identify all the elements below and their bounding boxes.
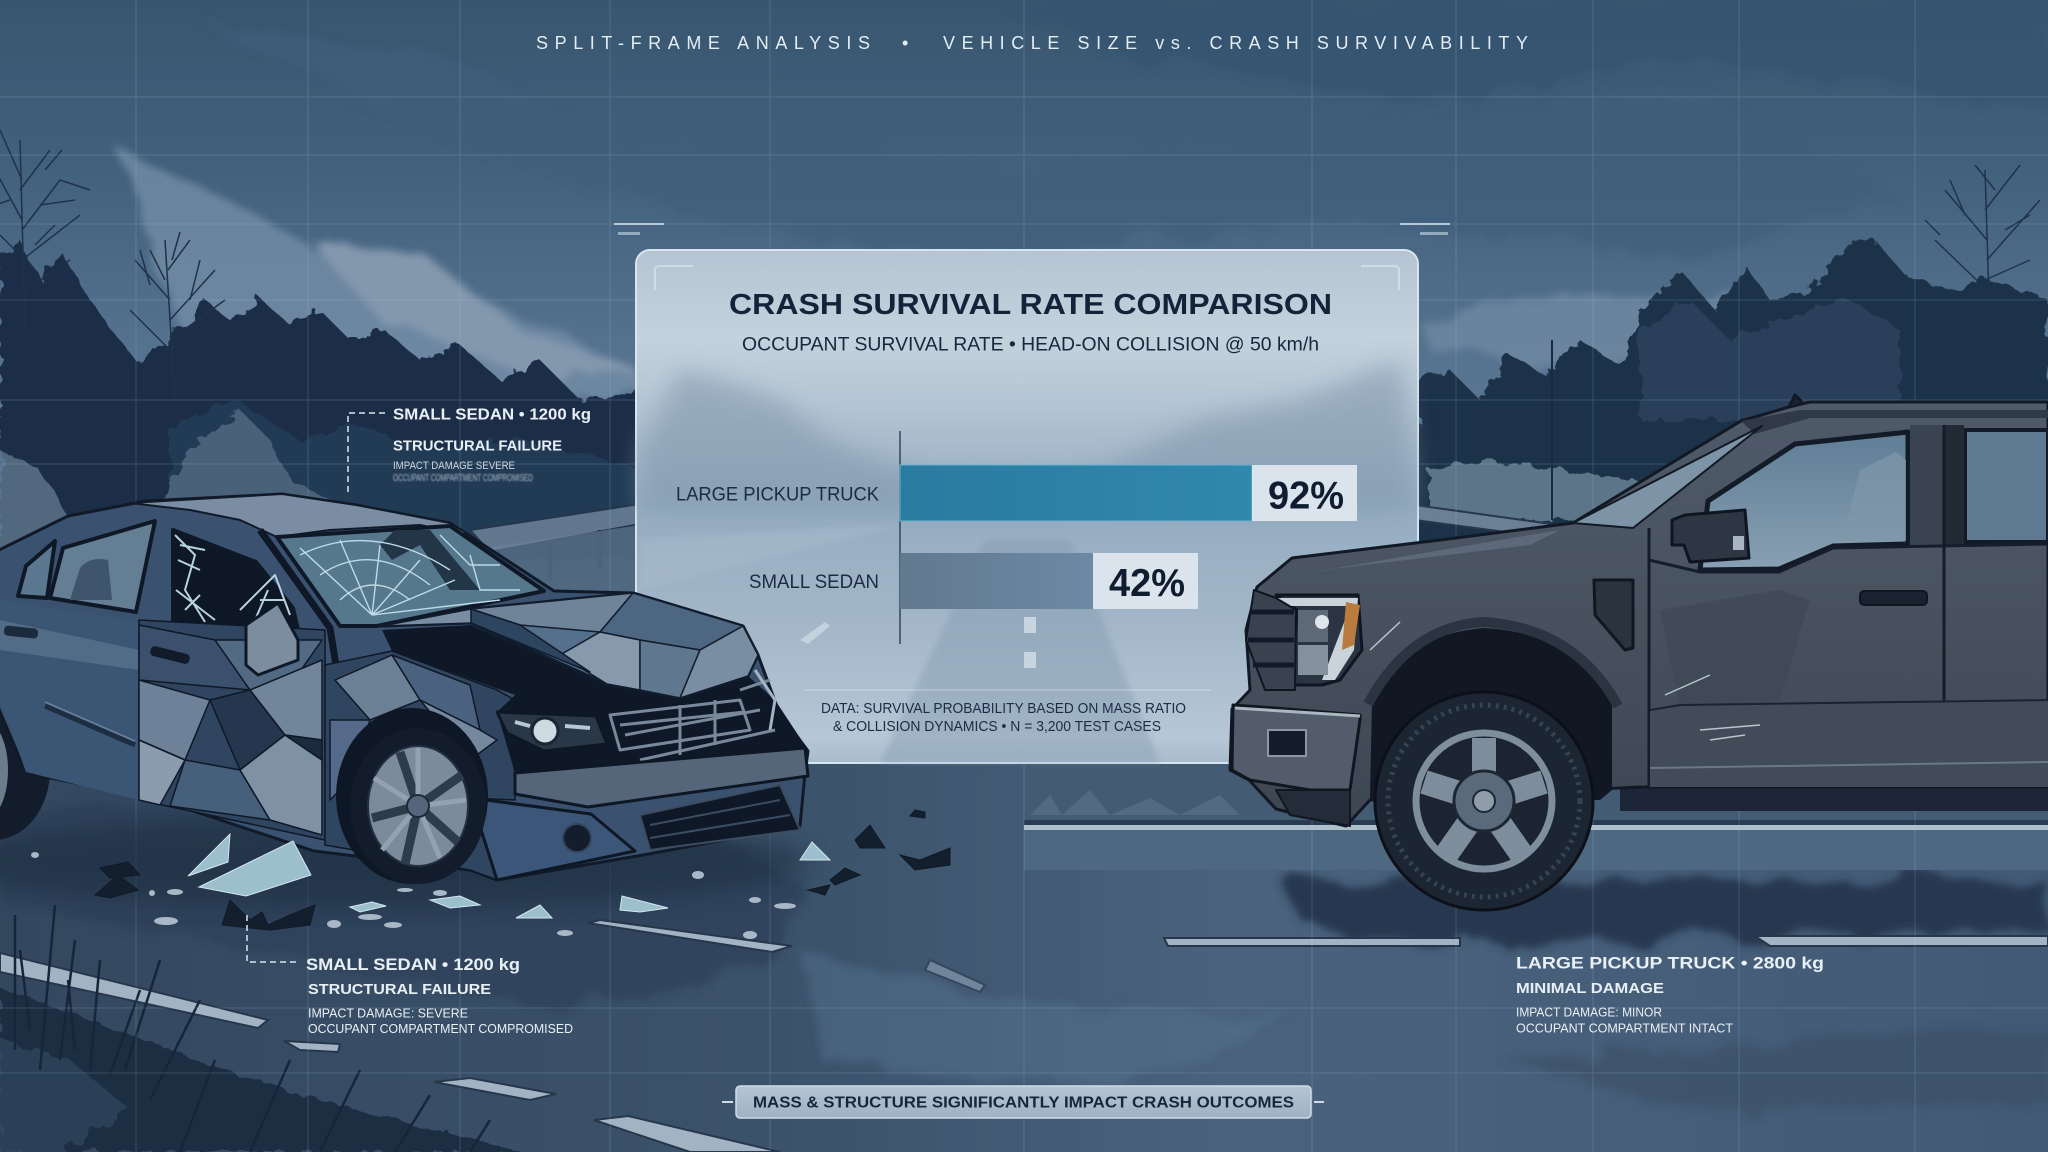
panel: crash survival chart bbox=[636, 250, 1418, 763]
sedan broken grille bbox=[610, 670, 775, 760]
data source note: & COLLISION DYNAMICS • N = 3,200 TEST CASES bbox=[833, 719, 1161, 735]
sedan rear windows bbox=[18, 521, 155, 612]
sedan side trim bbox=[45, 706, 135, 745]
truck belt line bbox=[1649, 544, 2048, 572]
sedan front wheel bbox=[336, 708, 488, 884]
background: bare branches left bbox=[0, 130, 225, 400]
callout: small sedan upper: OCCUPANT COMPARTMENT COMPROMISED bbox=[393, 473, 533, 484]
bar: small sedan: 42% bbox=[1109, 562, 1185, 605]
sedan door highlight bbox=[0, 620, 139, 670]
truck mud flap bbox=[1276, 790, 1350, 826]
sedan side mirror bbox=[246, 603, 298, 675]
bar: small sedan: SMALL SEDAN bbox=[749, 572, 879, 593]
truck bumper bbox=[1232, 705, 1360, 790]
truck fog lamp bbox=[1268, 730, 1306, 756]
illustration: pickup truck bbox=[1230, 395, 2048, 910]
panel background bbox=[636, 250, 1418, 763]
takeaway banner bbox=[722, 1086, 1324, 1118]
truck body bbox=[1230, 402, 2048, 826]
guardrail right bbox=[1415, 505, 1580, 542]
callout: small sedan lower bbox=[247, 915, 573, 1036]
callout: small sedan lower: OCCUPANT COMPARTMENT COMPROMISED bbox=[308, 1022, 573, 1036]
sedan shattered windshield bbox=[277, 526, 544, 626]
header strapline bbox=[536, 33, 1528, 53]
callout: small sedan upper bbox=[348, 406, 591, 492]
truck windshield bbox=[1573, 426, 1762, 528]
data source note: DATA: SURVIVAL PROBABILITY BASED ON MASS RATIO bbox=[821, 701, 1186, 717]
truck front wheel bbox=[1375, 692, 1593, 910]
header strapline: SPLIT-FRAME ANALYSIS bbox=[536, 33, 870, 53]
bar: large pickup truck: 92% bbox=[1268, 474, 1344, 518]
truck headlight bbox=[1276, 595, 1362, 685]
callout: small sedan upper: SMALL SEDAN • 1200 kg bbox=[393, 406, 591, 424]
sedan rear door panel bbox=[0, 600, 139, 800]
truck rear window bbox=[1965, 430, 2048, 542]
bar chart bbox=[676, 431, 1357, 644]
chart subtitle: OCCUPANT SURVIVAL RATE • HEAD-ON COLLISION @ 50 km/h bbox=[742, 334, 1319, 356]
background: bare branches right bbox=[1552, 165, 2040, 520]
bar: large pickup truck bbox=[676, 465, 1357, 521]
sedan engine bay bbox=[382, 625, 808, 773]
illustration: crashed sedan bbox=[0, 494, 810, 908]
bar: large pickup truck: LARGE PICKUP TRUCK bbox=[676, 484, 879, 506]
lane markings bbox=[0, 920, 2048, 1152]
sedan door handle bbox=[149, 645, 191, 665]
truck door dent bbox=[1660, 590, 1810, 710]
truck fender vent bbox=[1594, 580, 1633, 650]
callout: large pickup truck: LARGE PICKUP TRUCK • 2800 kg bbox=[1516, 954, 1824, 972]
truck front seat bbox=[1842, 452, 1906, 540]
callout: small sedan lower: IMPACT DAMAGE: SEVERE bbox=[308, 1006, 468, 1020]
sedan headlight bbox=[497, 712, 607, 751]
road surface bbox=[0, 760, 2048, 1152]
sedan rear handle bbox=[4, 625, 38, 639]
truck wheel arch bbox=[1370, 628, 1612, 800]
truck door handle bbox=[1860, 591, 1927, 605]
sedan ground shadow bbox=[0, 816, 810, 908]
truck side mirror bbox=[1672, 510, 1749, 562]
sedan crumpled door bbox=[139, 620, 325, 840]
callout: small sedan lower: SMALL SEDAN • 1200 kg bbox=[306, 955, 520, 974]
debris and broken glass bbox=[31, 810, 950, 939]
truck roof trim bbox=[1741, 410, 2048, 434]
callout: large pickup truck bbox=[1516, 954, 1824, 1036]
bar: small sedan bbox=[749, 553, 1198, 609]
truck B pillar bbox=[1910, 425, 1944, 547]
sedan fender facets bbox=[325, 651, 515, 880]
truck scratches bbox=[1370, 622, 1760, 740]
panel corner brackets bbox=[655, 266, 1399, 290]
dark metal fragments bbox=[95, 810, 950, 930]
callout: small sedan upper: STRUCTURAL FAILURE bbox=[393, 438, 562, 454]
header strapline: VEHICLE SIZE vs. CRASH SURVIVABILITY bbox=[943, 33, 1528, 53]
sedan crumpled hood bbox=[382, 593, 758, 698]
background: treeline right bbox=[1410, 240, 2048, 580]
roadside grass foreground bbox=[0, 905, 522, 1152]
chart title: CRASH SURVIVAL RATE COMPARISON bbox=[729, 289, 1332, 321]
takeaway banner: MASS & STRUCTURE SIGNIFICANTLY IMPACT CRASH OUTCOMES bbox=[753, 1094, 1294, 1112]
callout: small sedan upper: IMPACT DAMAGE SEVERE bbox=[393, 460, 515, 472]
guardrail left bbox=[470, 504, 640, 600]
sedan bumper bbox=[515, 748, 808, 807]
background: treeline left bbox=[0, 240, 640, 760]
callout: large pickup truck: MINIMAL DAMAGE bbox=[1516, 980, 1664, 997]
truck lower body sill bbox=[1650, 700, 2048, 787]
light gravel bbox=[31, 852, 796, 939]
sedan A pillar bbox=[260, 530, 340, 690]
HUD tick marks above panel bbox=[614, 223, 1450, 235]
truck grille bbox=[1246, 590, 1296, 690]
background: stormy sky bbox=[0, 0, 2048, 800]
roadside grass and shoulder line bbox=[1024, 762, 2048, 870]
truck underbody bbox=[1620, 783, 2048, 811]
sedan roof bbox=[130, 494, 470, 537]
glass shards bbox=[188, 834, 830, 918]
sedan lower bumper bbox=[471, 798, 635, 880]
sedan body bbox=[0, 494, 808, 880]
truck door lines bbox=[1649, 425, 1944, 790]
sedan lower grille bbox=[640, 785, 800, 850]
sedan rear wheel bbox=[0, 700, 50, 840]
data source note bbox=[803, 690, 1211, 735]
sedan fog lamp bbox=[563, 824, 591, 852]
truck hood highlight bbox=[1296, 530, 1560, 575]
callout: large pickup truck: IMPACT DAMAGE: MINOR bbox=[1516, 1006, 1662, 1020]
header strapline: • bbox=[902, 33, 908, 53]
sedan broken door window bbox=[173, 530, 298, 630]
truck antenna bbox=[1789, 395, 1802, 407]
callout: small sedan lower: STRUCTURAL FAILURE bbox=[308, 981, 491, 998]
truck front window bbox=[1700, 432, 1908, 570]
misty road inside panel bbox=[640, 525, 1160, 763]
callout: large pickup truck: OCCUPANT COMPARTMENT INTACT bbox=[1516, 1022, 1733, 1036]
misty trees inside panel bbox=[640, 360, 1414, 510]
